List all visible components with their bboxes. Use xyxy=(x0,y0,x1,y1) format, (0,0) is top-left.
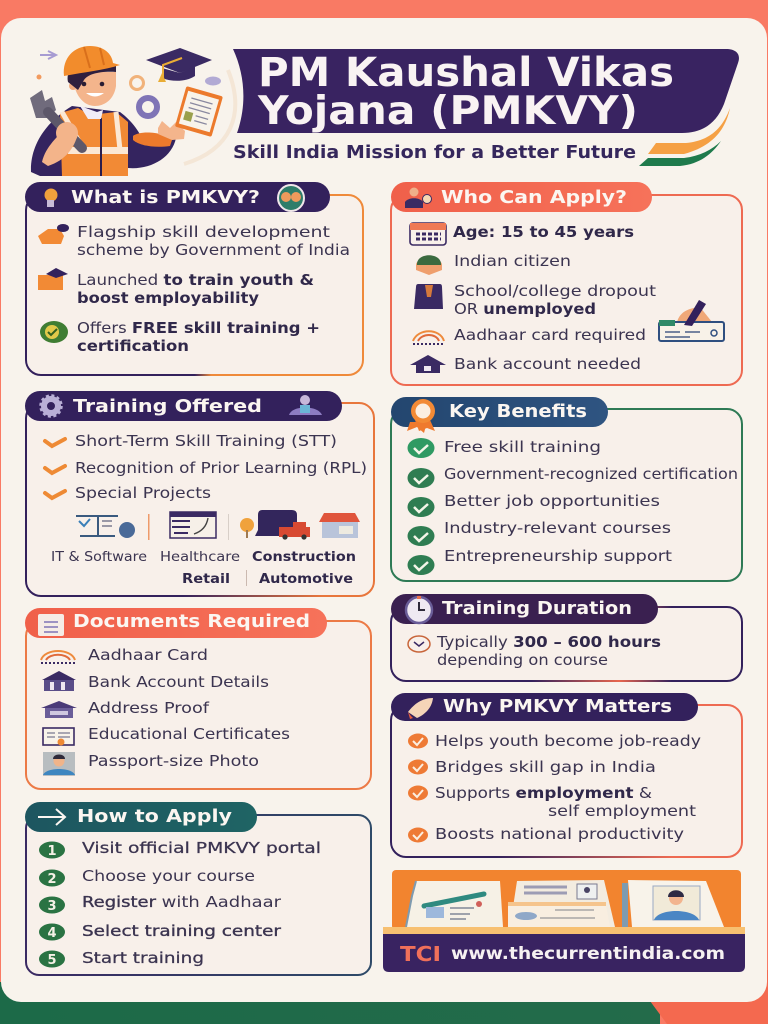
panel: Documents Required: Bank Account Details xyxy=(88,673,269,691)
panel: Documents Required: Educational Certificates xyxy=(88,725,290,743)
panel: How to Apply: Choose your course xyxy=(82,867,255,885)
heading xyxy=(25,802,257,832)
panel: Training Offered: Special Projects xyxy=(75,484,211,502)
title banner: PM Kaushal Vikas xyxy=(258,50,674,96)
vest xyxy=(60,108,128,176)
document: ID card xyxy=(406,881,503,927)
heading xyxy=(25,608,327,638)
hard hat xyxy=(64,46,120,76)
panel: Key Benefits: Better job opportunities xyxy=(444,492,660,510)
footer banner xyxy=(383,870,745,972)
heading xyxy=(25,391,342,421)
heading xyxy=(391,182,652,212)
icon: IT xyxy=(76,516,135,538)
heading xyxy=(391,397,608,433)
panel: What is PMKVY: certification xyxy=(77,337,189,355)
step 5: 5 xyxy=(47,953,57,968)
step 4: 4 xyxy=(47,926,57,941)
panel: Why PMKVY Matters xyxy=(391,693,742,857)
icon: retail xyxy=(319,513,360,538)
panel: Training Duration xyxy=(391,594,742,681)
panel: Training Offered: Automotive xyxy=(259,571,353,587)
panel: Training Offered: Retail xyxy=(182,571,230,587)
face xyxy=(68,66,116,106)
heading: Training Offered xyxy=(73,396,262,417)
decorative arc xyxy=(184,70,235,164)
heading: Why PMKVY Matters xyxy=(443,696,672,717)
arm and hand xyxy=(42,125,78,166)
heading: What is PMKVY? xyxy=(71,187,260,208)
panel: Key Benefits: Industry-relevant courses xyxy=(444,519,671,537)
heading xyxy=(391,594,658,624)
panel: Training Duration: depending on course xyxy=(437,651,608,669)
panel: Training Offered: IT & Software xyxy=(51,549,147,565)
panel: Why PMKVY Matters: Boosts national productivity xyxy=(435,825,684,843)
panel: How to Apply xyxy=(25,802,371,975)
heading: Training Duration xyxy=(442,598,632,619)
icon: jacket xyxy=(414,284,443,309)
step 2: 2 xyxy=(47,872,57,887)
panel: What is PMKVY: Flagship skill development xyxy=(77,223,330,241)
panel: Documents Required: Aadhaar Card xyxy=(88,646,208,664)
icon: green badge xyxy=(40,321,68,343)
panel: Documents Required: Passport-size Photo xyxy=(88,752,259,770)
website bar xyxy=(383,934,745,972)
document: passport photo xyxy=(622,880,724,927)
body xyxy=(31,106,176,176)
panel: Who Can Apply xyxy=(391,182,742,385)
panel: Training Offered: Healthcare xyxy=(160,549,240,565)
step 1: 1 xyxy=(47,844,57,859)
benefit checks xyxy=(408,438,434,575)
title banner: Yojana (PMKVY) xyxy=(257,89,638,134)
heading xyxy=(391,693,698,721)
panel: Why PMKVY Matters: Helps youth become job-ready xyxy=(435,732,701,750)
heading: Documents Required xyxy=(73,611,310,632)
panel: How to Apply: Register with Aadhaar xyxy=(82,893,282,911)
panel: Who Can Apply: Aadhaar card required xyxy=(454,326,646,344)
icon: photo xyxy=(43,752,75,776)
website bar: www.thecurrentindia.com xyxy=(451,944,725,964)
panel: How to Apply: Select training center xyxy=(82,922,282,940)
step 5 xyxy=(39,950,65,968)
icon: bank xyxy=(42,671,76,691)
panel: Documents Required xyxy=(25,608,371,789)
panel: Who Can Apply: OR unemployed xyxy=(454,300,596,318)
step 3 xyxy=(39,896,65,914)
panel: Why PMKVY Matters: Supports employment & xyxy=(435,784,652,802)
panel: What is PMKVY: boost employability xyxy=(77,289,259,307)
subtitle: Skill India Mission for a Better Future xyxy=(233,143,636,163)
panel: What is PMKVY: Launched to train youth & xyxy=(77,271,314,289)
panel: Key Benefits xyxy=(391,397,742,581)
panel: Training Offered: Short-Term Skill Training (STT) xyxy=(75,432,337,450)
panel: Training Duration: Typically 300 – 600 hours xyxy=(436,633,661,651)
panel: How to Apply: Start training xyxy=(82,949,204,967)
gears and marks xyxy=(130,76,144,90)
title banner xyxy=(233,49,739,134)
icon: calendar xyxy=(410,223,446,245)
clipboard xyxy=(175,86,223,137)
icon: healthcare xyxy=(170,512,216,538)
panel: Who Can Apply: Bank account needed xyxy=(454,355,641,373)
document: folder xyxy=(508,880,615,927)
graduation cap xyxy=(146,48,212,73)
panel: Training Offered: Recognition of Prior Learning (RPL) xyxy=(75,459,367,477)
illustration: skilled worker xyxy=(30,46,235,176)
icon: orange medal xyxy=(38,224,69,244)
panel: What is PMKVY: scheme by Government of India xyxy=(77,241,350,259)
icon: house xyxy=(41,701,77,718)
sector icons xyxy=(76,510,360,540)
panel: Who Can Apply: School/college dropout xyxy=(454,282,656,300)
heading: How to Apply xyxy=(77,806,232,827)
orange checks xyxy=(408,734,428,842)
heading: Key Benefits xyxy=(449,401,587,422)
heading: Who Can Apply? xyxy=(441,187,627,208)
panel: How to Apply: Visit official PMKVY portal xyxy=(82,839,321,857)
tricolour swoosh xyxy=(639,108,730,166)
panel: What is PMKVY: Offers FREE skill training + xyxy=(77,319,320,337)
checks xyxy=(45,439,65,498)
website bar: TCI xyxy=(400,942,441,966)
icon: construction xyxy=(240,510,310,540)
icon: Aadhaar xyxy=(41,651,75,663)
heading xyxy=(25,182,330,212)
open hand xyxy=(158,121,185,140)
panel: Why PMKVY Matters: Bridges skill gap in India xyxy=(435,758,656,776)
wrench xyxy=(30,90,82,148)
panel: Key Benefits: Government-recognized certification xyxy=(444,465,738,483)
panel: Who Can Apply: Indian citizen xyxy=(454,252,571,270)
panel: Training Offered xyxy=(25,391,374,596)
icon: bank house xyxy=(410,355,446,373)
panel: Key Benefits: Entrepreneurship support xyxy=(444,547,672,565)
panel: What is PMKVY xyxy=(25,182,363,375)
panel: Key Benefits: Free skill training xyxy=(444,438,601,456)
icon: certificate xyxy=(43,728,74,746)
icon: Aadhaar xyxy=(413,331,444,344)
step 1 xyxy=(39,842,65,859)
orange cuff xyxy=(133,133,172,147)
panel: Why PMKVY Matters: self employment xyxy=(548,802,696,820)
icon: form with pen xyxy=(659,300,724,341)
step 2 xyxy=(39,870,65,887)
icon: citizen xyxy=(416,255,442,275)
cream ledge xyxy=(383,927,745,935)
icon: clock xyxy=(408,636,430,652)
panel: Who Can Apply: Age: 15 to 45 years xyxy=(453,223,634,241)
step 4 xyxy=(39,924,65,941)
icon: cap envelope xyxy=(38,268,68,290)
step 3: 3 xyxy=(47,899,57,914)
panel: Training Offered: Construction xyxy=(252,549,356,565)
panel: Documents Required: Address Proof xyxy=(88,699,210,717)
